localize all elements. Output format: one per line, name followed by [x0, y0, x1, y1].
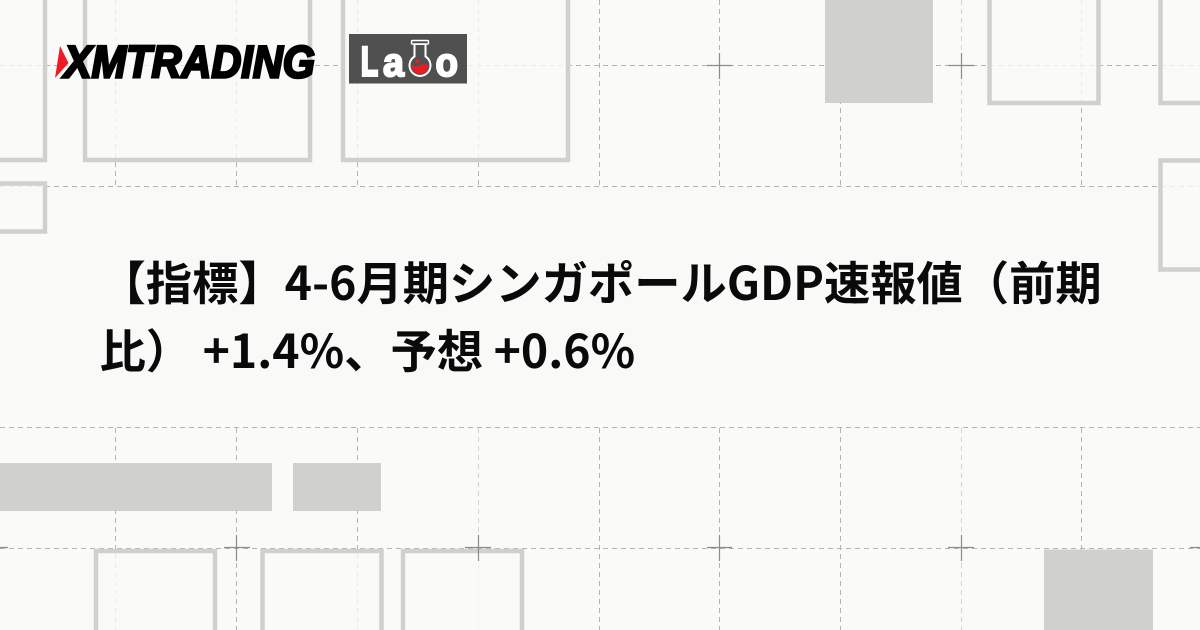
- logo: XMTRADING: XMTRADING: [61, 36, 315, 88]
- title: 【指標】4-6月期シンガポールGDP速報値（前期比） +1.4%、予想 +0.6%: [100, 246, 1102, 382]
- logo: Lab: [349, 34, 467, 85]
- logos: [55, 34, 467, 88]
- logo: Lab: a: [383, 41, 405, 85]
- logo: Lab: o: [436, 41, 458, 85]
- icon: flask: [410, 40, 430, 76]
- logo: Lab: L: [361, 38, 378, 84]
- content panel: [50, 187, 1150, 422]
